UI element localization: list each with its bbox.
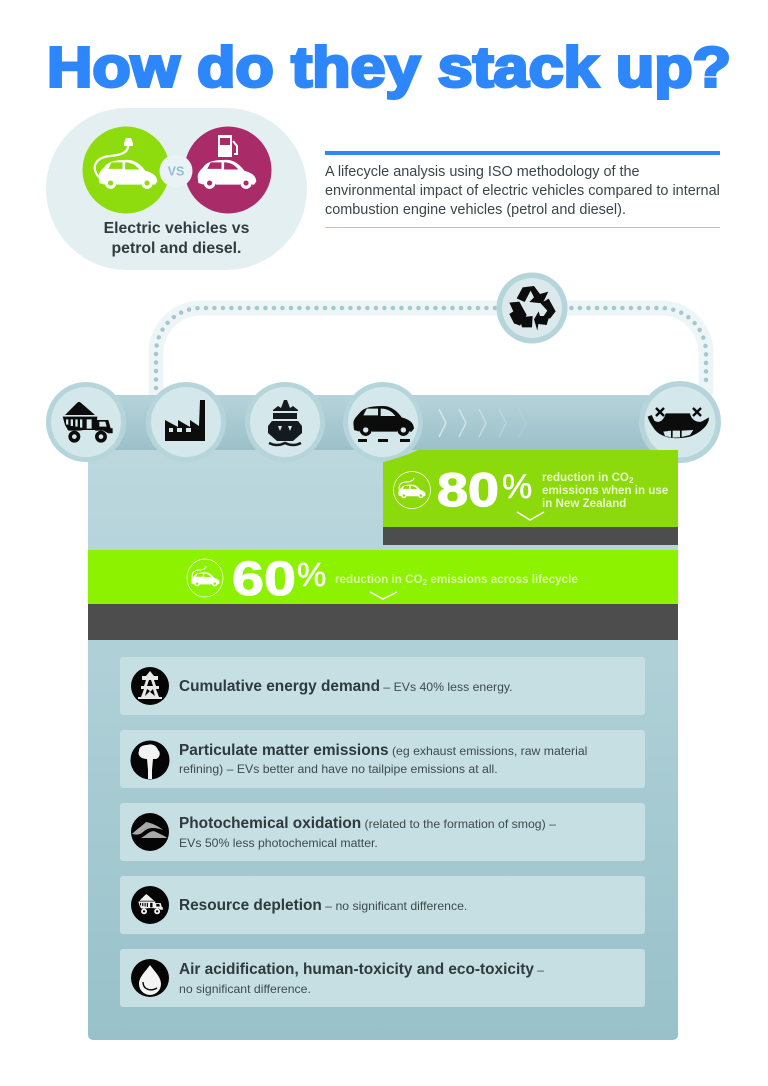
- icon: droplet: [131, 959, 169, 997]
- main panel: [88, 450, 678, 1040]
- item: photochemical oxidation: Photochemical oxidation (related to the formation of smog) –: [179, 815, 556, 832]
- icon: mining truck: [46, 382, 126, 462]
- panel: electric vs petrol badge: petrol and diesel.: [112, 240, 241, 257]
- green banner: [88, 550, 678, 604]
- 60% figure: 60: [232, 553, 296, 606]
- 80% description: in New Zealand: [542, 497, 626, 510]
- icon: car on road: [343, 382, 423, 462]
- chevron: [370, 592, 397, 599]
- item: cumulative energy demand: [120, 657, 645, 715]
- icon: truck: [131, 886, 169, 924]
- green banner: [383, 450, 678, 527]
- 60% description: emissions across lifecycle: [427, 573, 578, 586]
- 80% description: [542, 471, 669, 510]
- badge background: [46, 108, 307, 270]
- vs label: VS: [168, 164, 184, 178]
- item: air acidification: [120, 949, 645, 1007]
- chevron: [517, 512, 544, 520]
- dark bar: [88, 604, 678, 640]
- icon: pylon: [131, 667, 169, 705]
- lifecycle band: [86, 395, 680, 450]
- 80% figure: [437, 463, 532, 516]
- item: particulate matter emissions: refining) – EVs better and have no tailpipe emissions at all.: [179, 762, 498, 776]
- dark bar: [383, 527, 678, 545]
- icon: scrapped car: [639, 381, 721, 463]
- 80% description: reduction in CO: [542, 471, 629, 484]
- icon: petrol car: [184, 126, 272, 214]
- 80% description: emissions when in use: [542, 484, 669, 497]
- panel: 80% in-use reduction: [383, 450, 678, 545]
- icon: smoke stack: [130, 740, 170, 780]
- dotted lifecycle return path: [156, 308, 706, 392]
- icon: electric car outline: [187, 559, 223, 597]
- panel: electric vs petrol badge: [46, 108, 307, 270]
- icon: recycle: [496, 272, 568, 344]
- panel: 60% lifecycle reduction: [88, 550, 678, 640]
- intro text block: A lifecycle analysis using ISO methodology of the: [325, 164, 640, 180]
- icon: electric car: [82, 126, 170, 214]
- item: resource depletion: [120, 876, 645, 934]
- item: particulate matter emissions: [120, 730, 645, 788]
- 60% description: reduction in CO: [335, 573, 423, 586]
- intro text block: environmental impact of electric vehicles compared to internal: [325, 183, 720, 199]
- item: photochemical oxidation: [120, 803, 645, 861]
- 80% figure: %: [502, 468, 532, 506]
- item: resource depletion: Resource depletion – no significant difference.: [179, 897, 467, 914]
- 60% description: 2: [423, 578, 428, 587]
- badge caption: Electric vehicles vs: [104, 220, 250, 237]
- item: air acidification: Air acidification, human-toxicity and eco-toxicity –: [179, 961, 544, 978]
- 80% description: 2: [629, 476, 634, 485]
- 60% figure: %: [297, 556, 326, 593]
- intro text block: combustion engine vehicles (petrol and diesel).: [325, 202, 626, 218]
- vs label: [160, 154, 192, 188]
- 60% figure: [232, 553, 326, 606]
- icon: ship: [245, 382, 325, 462]
- item: air acidification: no significant difference.: [179, 982, 311, 996]
- item: cumulative energy demand: Cumulative energy demand – EVs 40% less energy.: [179, 678, 513, 695]
- icon: smog: [131, 813, 169, 851]
- item: photochemical oxidation: EVs 50% less photochemical matter.: [179, 836, 378, 850]
- icon: electric car outline: [394, 472, 430, 508]
- 80% figure: 80: [437, 463, 499, 516]
- item: particulate matter emissions: Particulate matter emissions (eg exhaust emissions, raw material: [179, 742, 587, 759]
- icon: factory: [146, 382, 226, 462]
- intro text block: [325, 151, 720, 228]
- title: How do they stack up?: [47, 36, 731, 98]
- chevrons: [439, 409, 526, 437]
